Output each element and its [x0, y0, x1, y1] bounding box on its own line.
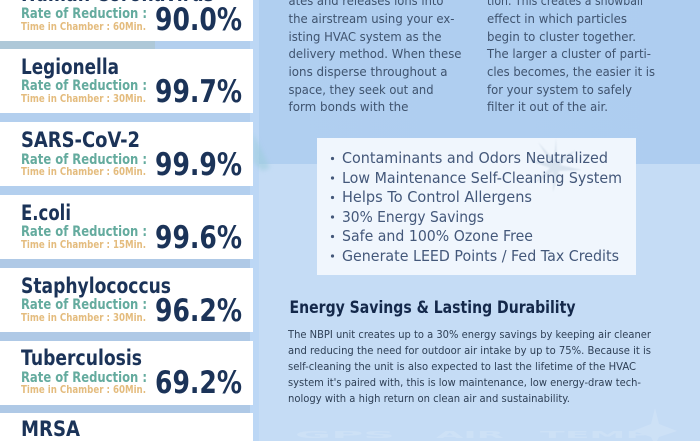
text block: ion delivery: isting HVAC system as the — [288, 29, 442, 44]
text block: particle clustering: begin to cluster together. — [487, 29, 636, 44]
text block: particle clustering: effect in which particles — [487, 11, 627, 26]
text block: energy savings: self-cleaning the unit is also expected to last the lifetime of the HVAC — [288, 360, 636, 373]
panel: benefits list: Helps To Control Allergens — [342, 188, 532, 206]
card: Legionella — [0, 49, 253, 113]
text block: energy savings: nology with a high return on clean air and sustainability. — [288, 392, 570, 405]
text block: particle clustering: for your system to safely — [487, 82, 633, 97]
card: SARS-CoV-2: Time in Chamber : 60Min. — [21, 166, 146, 178]
panel: benefits list — [317, 138, 636, 275]
card: SARS-CoV-2: SARS-CoV-2 — [21, 128, 140, 152]
text block: energy savings: The NBPI unit creates up to a 30% energy savings by keeping air cleaner — [287, 328, 651, 341]
text block: particle clustering: cles becomes, the easier it is — [487, 64, 655, 79]
card: Staphylococcus — [0, 268, 253, 332]
teal decorative swoosh — [253, 133, 270, 171]
heading: energy savings: Energy Savings & Lasting Durability — [290, 298, 576, 317]
text block: particle clustering — [486, 0, 655, 114]
text block: particle clustering: filter it out of the air. — [487, 99, 608, 114]
card: SARS-CoV-2: Rate of Reduction : — [21, 152, 147, 168]
card: Human Coronavirus — [0, 0, 253, 41]
card: E.coli: 99.6% — [155, 220, 242, 256]
panel: benefits list: 30% Energy Savings — [342, 208, 484, 226]
text block: energy savings: system it's paired with, this is low maintenance, low energy-draw tech- — [288, 376, 641, 389]
card: MRSA: MRSA — [21, 417, 81, 441]
text block: particle clustering: The larger a cluster of parti- — [486, 46, 651, 61]
card: SARS-CoV-2: 99.9% — [155, 147, 242, 183]
text block: ion delivery: delivery method. When these — [288, 46, 462, 61]
text block: ion delivery: ions disperse throughout a — [288, 64, 448, 79]
card: MRSA — [0, 413, 253, 441]
text block: ion delivery — [288, 0, 462, 114]
card: Tuberculosis: Tuberculosis — [21, 346, 142, 370]
card: Human Coronavirus: Time in Chamber : 60Min. — [21, 21, 146, 33]
card: E.coli: Time in Chamber : 15Min. — [21, 239, 146, 251]
watermark logo — [295, 408, 677, 441]
panel: benefits list: Safe and 100% Ozone Free — [342, 227, 533, 245]
card: Staphylococcus: 96.2% — [155, 293, 242, 329]
text block: ion delivery: the airstream using your ex- — [288, 11, 454, 26]
card: Staphylococcus: Staphylococcus — [21, 274, 171, 298]
card: E.coli: Rate of Reduction : — [21, 224, 147, 240]
card: Tuberculosis: Rate of Reduction : — [21, 370, 147, 386]
card: Legionella: Legionella — [21, 55, 119, 79]
watermark logo: TEMP — [540, 430, 652, 441]
card: SARS-CoV-2 — [0, 122, 253, 186]
text block: energy savings: and reducing the need for outdoor air intake by up to 75%. Because it is — [288, 344, 651, 357]
card: Staphylococcus: Rate of Reduction : — [21, 297, 147, 313]
panel: benefits list: Low Maintenance Self-Cleaning System — [342, 169, 622, 187]
watermark logo: AIR — [436, 430, 505, 441]
text block: energy savings — [287, 328, 651, 405]
card: Legionella: 99.7% — [155, 74, 242, 110]
card: Tuberculosis — [0, 341, 253, 405]
card: Tuberculosis: 69.2% — [155, 365, 242, 401]
decorative star watermark — [528, 138, 582, 192]
card: Tuberculosis: Time in Chamber : 60Min. — [21, 384, 146, 396]
panel: benefits list: Generate LEED Points / Fed Tax Credits — [342, 247, 619, 265]
card: Human Coronavirus: Rate of Reduction : — [21, 6, 147, 22]
card: Human Coronavirus: 90.0% — [155, 2, 242, 38]
watermark logo: GPS — [295, 430, 395, 441]
card: E.coli: E.coli — [21, 201, 71, 225]
text block: ion delivery: form bonds with the — [288, 99, 409, 114]
card: E.coli — [0, 195, 253, 259]
card: Legionella: Time in Chamber : 30Min. — [21, 93, 146, 105]
text block: ion delivery: space, they seek out and — [288, 82, 434, 97]
card: Staphylococcus: Time in Chamber : 30Min. — [21, 312, 146, 324]
card: Legionella: Rate of Reduction : — [21, 78, 147, 94]
panel: benefits list: Contaminants and Odors Neutralized — [342, 149, 608, 167]
